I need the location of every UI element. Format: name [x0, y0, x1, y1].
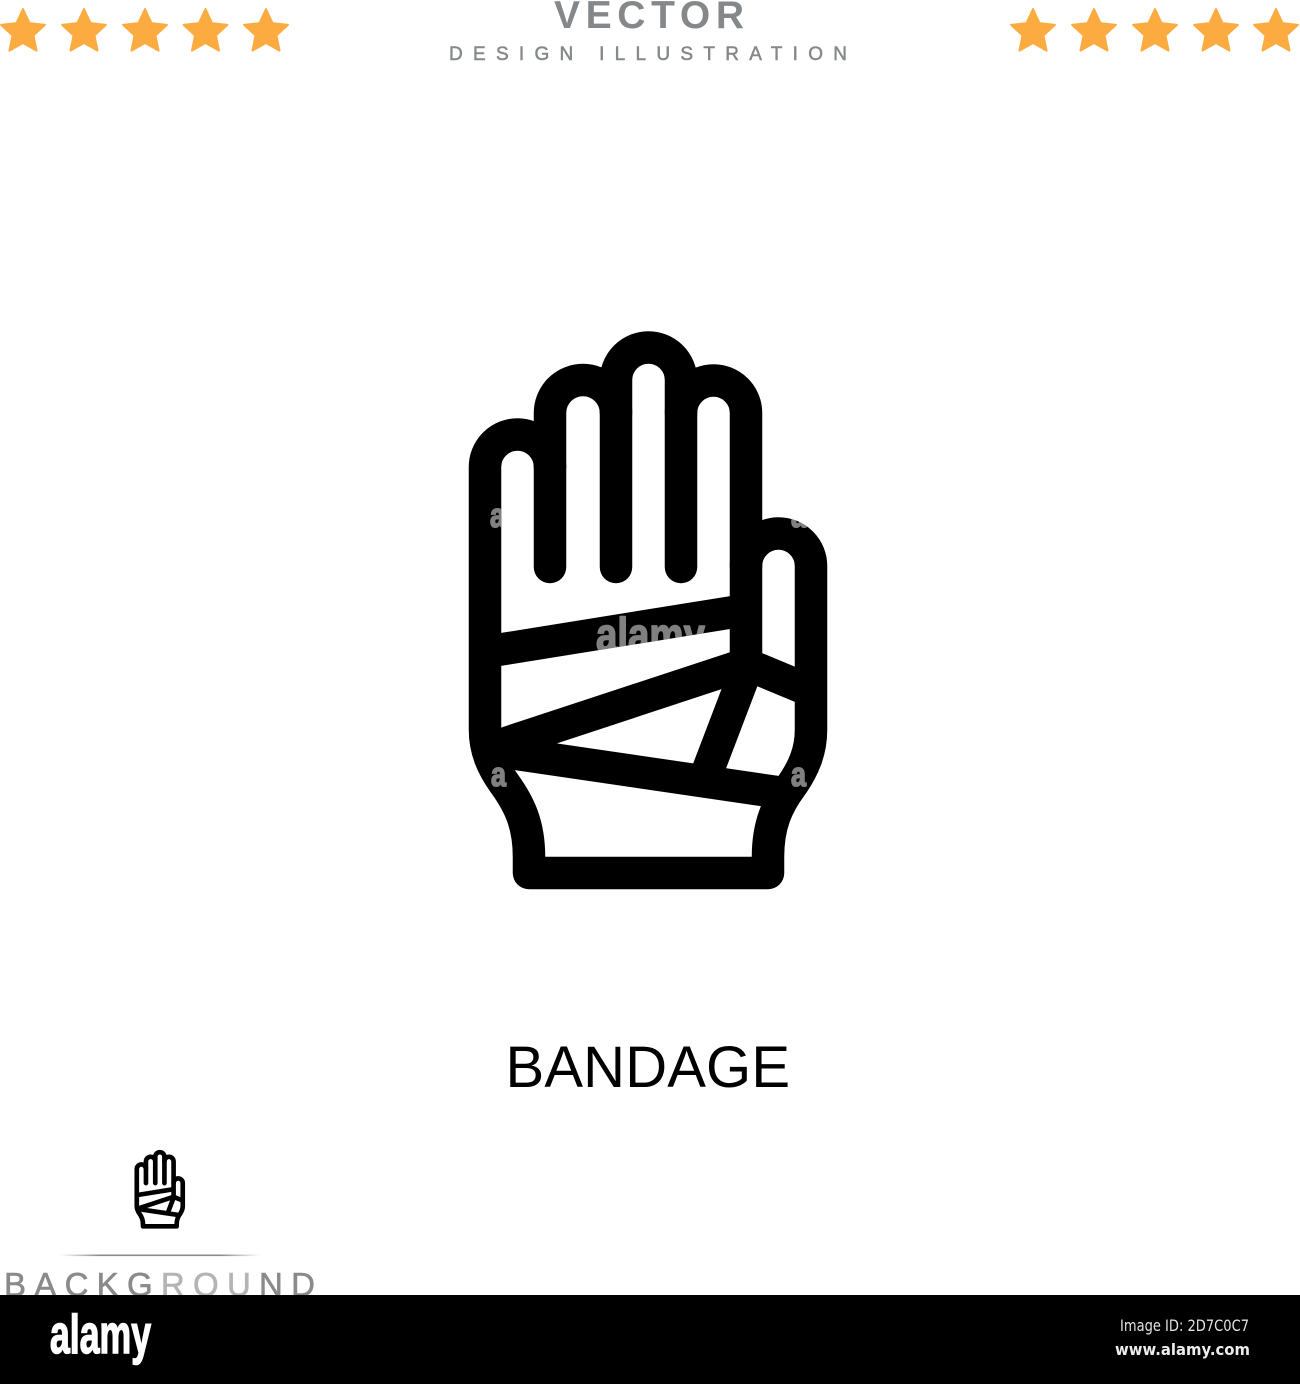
footer image ID: Image ID: 2D7C0C7: [1120, 1316, 1249, 1335]
watermark: stray letters: a: [791, 497, 807, 535]
footer site URL: www.alamy.com: [1115, 1340, 1250, 1359]
watermark: stray letters: [490, 497, 807, 794]
right star rating: [1011, 9, 1298, 51]
footer bar: [0, 1295, 1300, 1384]
header subtitle: DESIGN ILLUSTRATION: DESIGN ILLUSTRATION: [449, 44, 847, 65]
icon label: BANDAGE: BANDAGE: [506, 1035, 790, 1100]
watermark: alamy centre: alamy: [596, 608, 705, 661]
label: BACKGROUND: BACKG ROU ND: [4, 1266, 315, 1303]
watermark: stray letters: a: [791, 756, 807, 794]
footer logo: alamy: alamy: [50, 1303, 151, 1365]
divider rule: [60, 1254, 260, 1256]
icon: bandaged hand: [485, 348, 811, 873]
watermark: stray letters: a: [490, 497, 506, 535]
left star rating: [1, 9, 288, 51]
watermark: stray letters: a: [491, 756, 507, 794]
small icon: bandaged hand: [137, 1152, 183, 1226]
